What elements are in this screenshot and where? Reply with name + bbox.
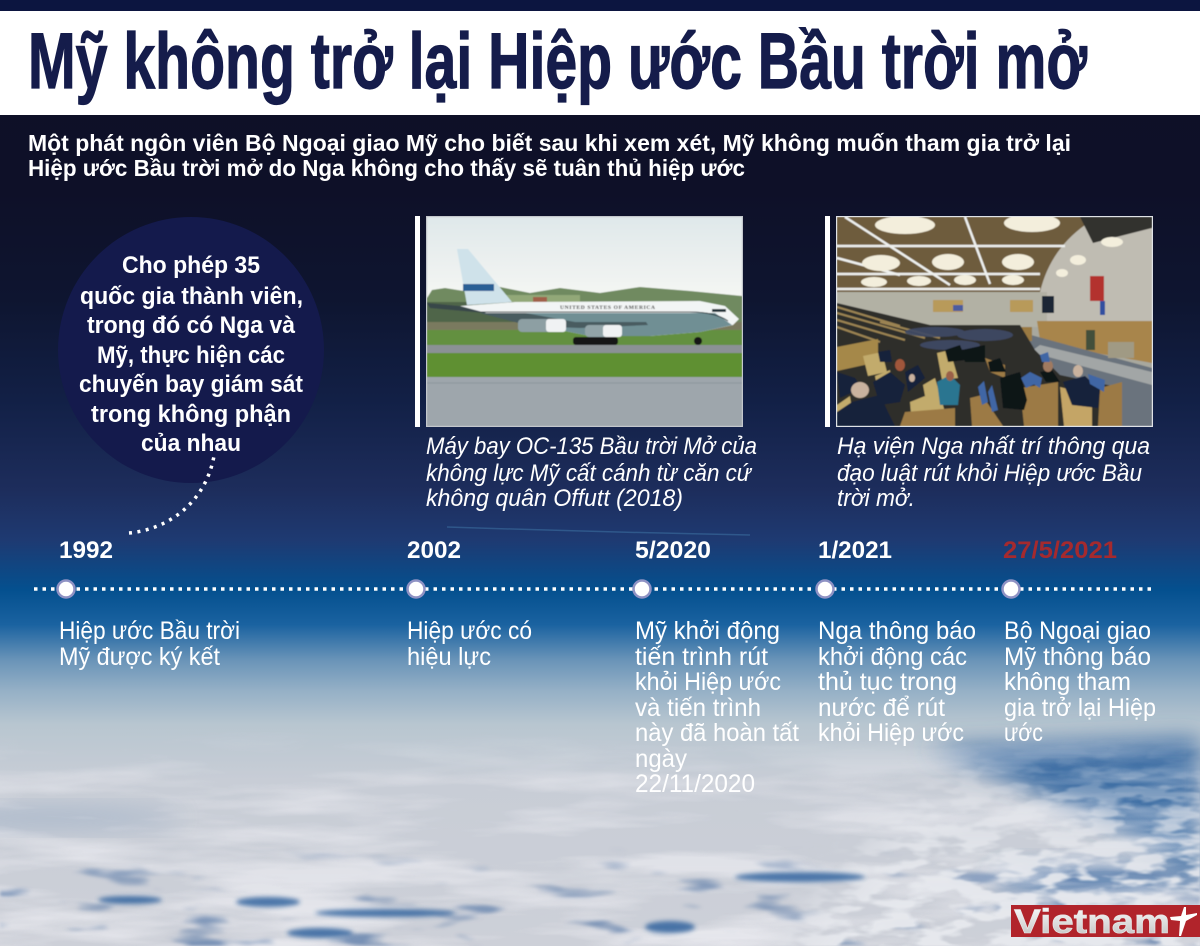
photo caption: aircraft: Máy bay OC-135 Bầu trời Mở của <box>426 433 757 460</box>
photo caption: Duma: đạo luật rút khỏi Hiệp ước Bầu <box>837 460 1142 487</box>
subtitle: Một phát ngôn viên Bộ Ngoại giao Mỹ cho biết sau khi xem xét, Mỹ không muốn tham gia trở lại <box>28 130 1071 156</box>
subtitle <box>28 130 1071 181</box>
timeline entry: 2002: 2002 <box>407 537 461 564</box>
circle callout: treaty summary: Cho phép 35 <box>122 252 260 279</box>
photo caption: aircraft <box>426 433 757 512</box>
timeline entry: 1992: Mỹ được ký kết <box>59 643 220 671</box>
circle callout: treaty summary: trong đó có Nga và <box>87 312 296 339</box>
circle callout: treaty summary: chuyến bay giám sát <box>79 371 303 398</box>
timeline entry: 5/2020: 22/11/2020 <box>635 770 755 798</box>
logo: Vietnam+ <box>1011 903 1200 941</box>
timeline entry: 5/2020: và tiến trình <box>635 694 761 722</box>
timeline entry: 27/5/2021: ước <box>1004 719 1043 747</box>
dotted connector from circle to 1992 <box>129 456 214 533</box>
timeline entry: 5/2020: Mỹ khởi động <box>635 617 780 645</box>
timeline entry: 27/5/2021: 27/5/2021 <box>1003 537 1117 564</box>
timeline axis with markers <box>34 580 1153 598</box>
circle callout: treaty summary: trong không phận <box>91 401 291 428</box>
circle callout: treaty summary: Mỹ, thực hiện các <box>97 342 285 369</box>
timeline entry: 27/5/2021: không tham <box>1004 668 1131 696</box>
timeline entry: 2002: Hiệp ước có <box>407 617 532 645</box>
timeline entry: 1992: Hiệp ước Bầu trời <box>59 617 240 645</box>
circle callout: treaty summary: quốc gia thành viên, <box>80 283 303 310</box>
circle callout: treaty summary <box>58 217 324 483</box>
timeline entry: 1/2021: 1/2021 <box>818 537 892 564</box>
logo: Vietnam+: Vietnam <box>1014 903 1170 941</box>
timeline entry: 5/2020: khỏi Hiệp ước <box>635 668 781 696</box>
timeline entry: 1/2021: thủ tục trong <box>818 668 957 696</box>
photo caption: Duma: trời mở. <box>837 485 915 512</box>
timeline entry: 1/2021: nước để rút <box>818 694 945 722</box>
timeline entry: 1992: 1992 <box>59 537 113 564</box>
timeline entry: 2002: hiệu lực <box>407 643 491 671</box>
photo caption: aircraft: không quân Offutt (2018) <box>426 485 683 512</box>
circle callout: treaty summary: của nhau <box>141 430 241 457</box>
timeline entry: 1/2021: Nga thông báo <box>818 617 976 645</box>
photo: Russian State Duma <box>825 214 1153 427</box>
timeline entry: 5/2020: này đã hoàn tất <box>635 719 799 747</box>
timeline entry: 5/2020: 5/2020 <box>635 537 711 564</box>
timeline entry: 27/5/2021: gia trở lại Hiệp <box>1004 694 1156 722</box>
timeline entry: 1/2021: khởi động các <box>818 643 967 671</box>
timeline entry: 2002 <box>407 537 532 671</box>
timeline entry: 27/5/2021: Bộ Ngoại giao <box>1004 617 1151 645</box>
subtitle: Hiệp ước Bầu trời mở do Nga không cho thấy sẽ tuân thủ hiệp ước <box>28 155 745 181</box>
photo: OC-135 aircraft: UNITED STATES OF AMERICA <box>560 305 655 311</box>
timeline entry: 5/2020: ngày <box>635 745 687 773</box>
photo caption: Duma <box>837 433 1150 512</box>
timeline entry: 1/2021: khỏi Hiệp ước <box>818 719 964 747</box>
timeline entry: 5/2020 <box>635 537 799 798</box>
timeline entry: 27/5/2021: Mỹ thông báo <box>1004 643 1151 671</box>
title band <box>0 11 1200 115</box>
timeline entry: 1/2021 <box>818 537 976 747</box>
timeline entry: 1992 <box>59 537 240 671</box>
timeline entry: 27/5/2021 <box>1003 537 1156 747</box>
photo caption: Duma: Hạ viện Nga nhất trí thông qua <box>837 433 1150 460</box>
photo caption: aircraft: không lực Mỹ cất cánh từ căn cứ <box>426 460 753 487</box>
photo: OC-135 aircraft <box>415 216 743 427</box>
timeline entry: 5/2020: tiến trình rút <box>635 643 768 671</box>
